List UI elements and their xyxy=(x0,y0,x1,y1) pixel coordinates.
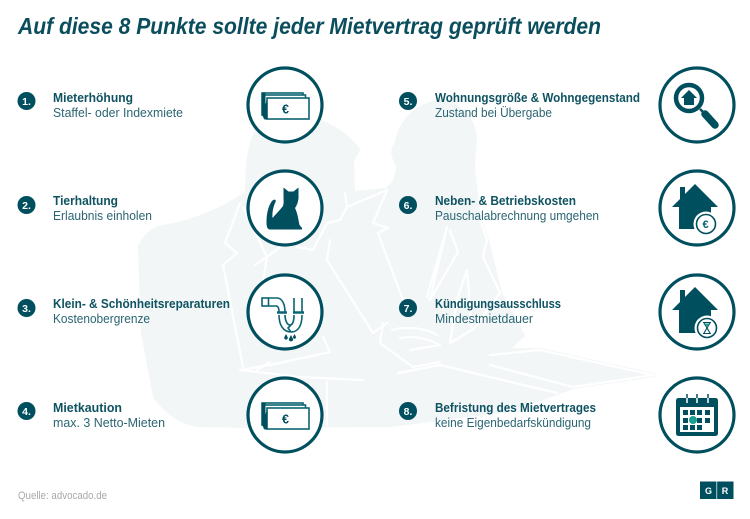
icon: cat xyxy=(248,171,322,245)
item 7: Kündigungsausschluss: Mindestmietdauer xyxy=(435,312,533,326)
item 8: Befristung des Mietvertrages: 8. xyxy=(404,406,412,418)
icon: house with euro coin: € xyxy=(702,219,709,231)
item 5: Wohnungsgröße & Wohngegenstand: Wohnungsgröße & Wohngegenstand xyxy=(435,91,640,105)
item 4: Mietkaution: 4. xyxy=(22,406,31,418)
item 1: Mieterhöhung: Mieterhöhung xyxy=(53,91,133,105)
icon: house with hourglass xyxy=(660,275,734,349)
item 1: Mieterhöhung: Staffel- oder Indexmiete xyxy=(53,106,183,120)
item 5: Wohnungsgröße & Wohngegenstand: 5. xyxy=(404,96,412,108)
item 2: Tierhaltung: Erlaubnis einholen xyxy=(53,209,152,223)
item 7: Kündigungsausschluss xyxy=(399,297,561,326)
logo xyxy=(700,482,734,499)
logo: G xyxy=(705,486,712,496)
item 8: Befristung des Mietvertrages xyxy=(399,401,596,430)
icon: magnifier with house xyxy=(660,68,734,142)
item 3: Klein- & Schönheitsreparaturen: 3. xyxy=(22,303,31,315)
icon: money bills: € xyxy=(282,412,289,426)
item 6: Neben- & Betriebskosten: 6. xyxy=(404,200,412,212)
logo: R xyxy=(722,486,729,496)
item 4: Mietkaution: max. 3 Netto-Mieten xyxy=(53,416,165,430)
icon: calendar xyxy=(660,378,734,452)
item 5: Wohnungsgröße & Wohngegenstand xyxy=(399,91,640,120)
item 3: Klein- & Schönheitsreparaturen xyxy=(18,297,230,326)
title: Auf diese 8 Punkte sollte jeder Mietvertrag geprüft werden xyxy=(17,13,601,39)
item 2: Tierhaltung: Tierhaltung xyxy=(53,194,118,208)
item 8: Befristung des Mietvertrages: Befristung des Mietvertrages xyxy=(435,401,596,415)
item 1: Mieterhöhung: 1. xyxy=(22,96,31,108)
background silhouette: two people at a desk xyxy=(140,102,653,426)
item 2: Tierhaltung: 2. xyxy=(22,200,31,212)
item 8: Befristung des Mietvertrages: keine Eigenbedarfskündigung xyxy=(435,416,591,430)
item 6: Neben- & Betriebskosten: Neben- & Betriebskosten xyxy=(435,194,576,208)
icon: leaking pipe xyxy=(248,275,322,349)
item 4: Mietkaution xyxy=(18,401,165,430)
item 1: Mieterhöhung xyxy=(18,91,183,120)
item 5: Wohnungsgröße & Wohngegenstand: Zustand bei Übergabe xyxy=(435,106,552,120)
item 3: Klein- & Schönheitsreparaturen: Kostenobergrenze xyxy=(53,312,150,326)
item 6: Neben- & Betriebskosten xyxy=(399,194,599,223)
item 3: Klein- & Schönheitsreparaturen: Klein- & Schönheitsreparaturen xyxy=(53,297,230,311)
item 2: Tierhaltung xyxy=(18,194,152,223)
item 7: Kündigungsausschluss: Kündigungsausschluss xyxy=(435,297,561,311)
item 7: Kündigungsausschluss: 7. xyxy=(404,303,412,315)
source note: Quelle: advocado.de xyxy=(18,490,107,502)
item 4: Mietkaution: Mietkaution xyxy=(53,401,122,415)
icon: money bills xyxy=(248,378,322,452)
icon: house with euro coin xyxy=(660,171,734,245)
item 6: Neben- & Betriebskosten: Pauschalabrechnung umgehen xyxy=(435,209,599,223)
icon: money bills: € xyxy=(282,102,289,116)
icon: money bills xyxy=(248,68,322,142)
